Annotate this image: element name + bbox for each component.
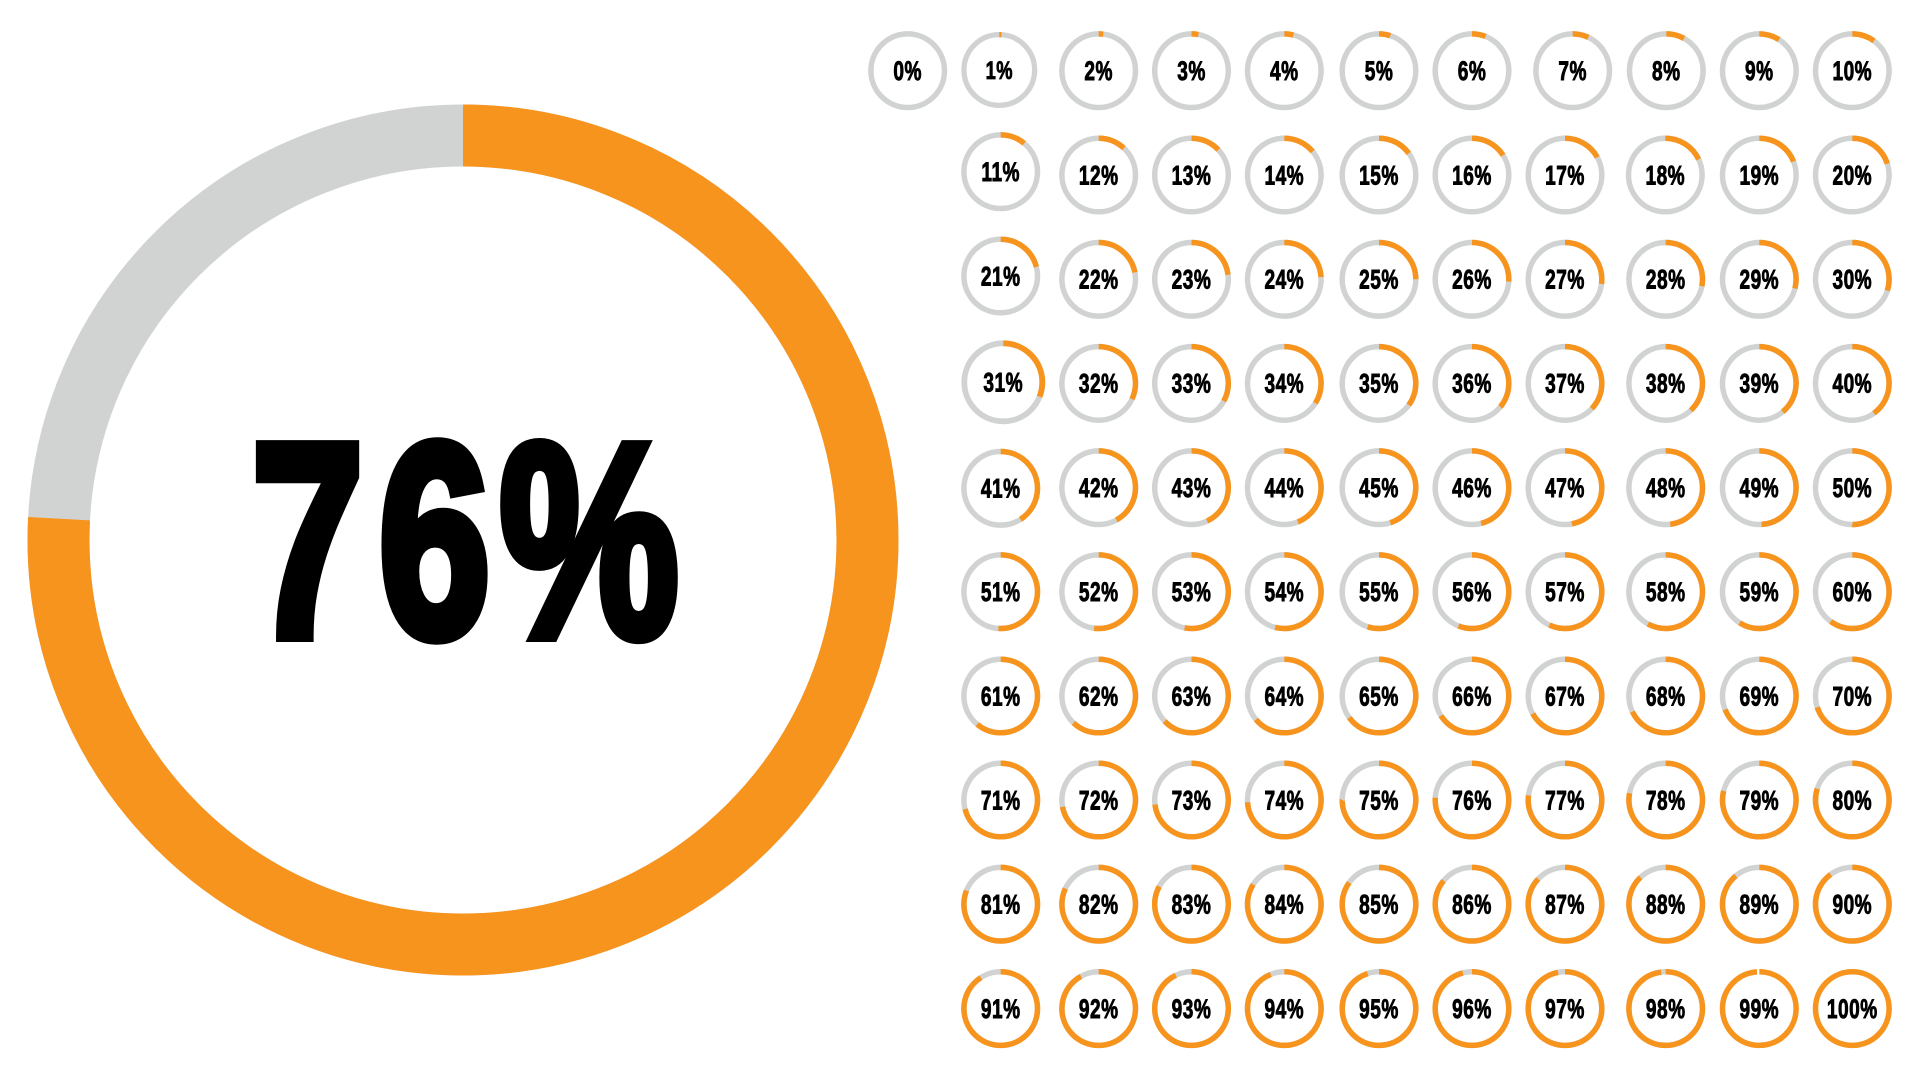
- ring 75%: [1342, 763, 1416, 837]
- ring 18%: 18%: [1645, 160, 1685, 190]
- ring 76%: 76%: [1452, 785, 1492, 815]
- ring 41%: 41%: [981, 473, 1021, 503]
- ring 69%: 69%: [1739, 681, 1779, 711]
- ring 98%: [1629, 972, 1702, 1045]
- ring 17%: [1528, 138, 1602, 212]
- ring 61%: 61%: [981, 681, 1021, 711]
- ring 74%: [1248, 763, 1321, 837]
- ring 84%: 84%: [1264, 889, 1304, 919]
- ring 34%: 34%: [1264, 369, 1304, 398]
- ring 17%: 17%: [1545, 160, 1585, 190]
- ring 53%: [1155, 555, 1228, 628]
- ring 89%: [1722, 867, 1796, 941]
- ring 45%: 45%: [1359, 473, 1399, 503]
- ring 42%: [1062, 451, 1136, 524]
- ring 26%: [1435, 242, 1509, 316]
- ring 2%: 2%: [1084, 56, 1113, 86]
- ring 74%: 74%: [1264, 785, 1304, 815]
- ring 94%: [1248, 972, 1321, 1045]
- ring 94%: 94%: [1264, 994, 1304, 1024]
- ring 22%: [1062, 242, 1136, 316]
- ring 68%: 68%: [1646, 681, 1686, 711]
- large value label: 76%: [252, 387, 679, 695]
- ring 31%: [964, 343, 1042, 421]
- ring 70%: 70%: [1832, 681, 1872, 711]
- ring 10%: [1816, 34, 1889, 108]
- ring 33%: 33%: [1172, 369, 1211, 398]
- ring 42%: 42%: [1079, 473, 1119, 503]
- ring 86%: [1435, 867, 1509, 941]
- ring 57%: [1528, 555, 1602, 628]
- ring 82%: 82%: [1079, 889, 1119, 919]
- ring 32%: [1062, 347, 1136, 420]
- ring 65%: 65%: [1359, 681, 1399, 711]
- ring 66%: [1435, 659, 1509, 733]
- ring 78%: 78%: [1646, 785, 1686, 815]
- ring 100%: 100%: [1827, 994, 1878, 1024]
- ring 59%: [1722, 555, 1796, 628]
- ring 45%: [1342, 451, 1416, 524]
- ring 19%: 19%: [1739, 160, 1779, 190]
- ring 48%: [1629, 451, 1702, 524]
- ring 68%: [1629, 659, 1702, 733]
- ring 87%: [1528, 867, 1602, 941]
- ring 93%: 93%: [1172, 994, 1211, 1024]
- ring 14%: [1248, 138, 1321, 212]
- ring 69%: [1722, 659, 1796, 733]
- ring 5%: 5%: [1365, 56, 1393, 86]
- ring 21%: 21%: [981, 261, 1021, 291]
- ring 80%: 80%: [1832, 785, 1872, 815]
- ring 92%: 92%: [1079, 994, 1119, 1024]
- ring 47%: [1528, 451, 1602, 524]
- ring 26%: 26%: [1452, 264, 1492, 294]
- ring 75%: 75%: [1359, 785, 1399, 815]
- ring 55%: 55%: [1359, 577, 1399, 607]
- ring 36%: [1435, 347, 1509, 420]
- ring 90%: 90%: [1832, 889, 1872, 919]
- ring 63%: 63%: [1172, 681, 1211, 711]
- ring 20%: 20%: [1832, 160, 1872, 190]
- ring 88%: [1629, 867, 1702, 941]
- ring 23%: [1155, 242, 1228, 316]
- ring 24%: 24%: [1264, 264, 1304, 294]
- ring 35%: 35%: [1359, 369, 1399, 398]
- ring 95%: [1342, 972, 1416, 1045]
- ring 67%: [1528, 659, 1602, 733]
- ring 72%: 72%: [1079, 785, 1119, 815]
- ring 79%: [1722, 763, 1796, 837]
- ring 14%: 14%: [1264, 160, 1304, 190]
- ring 73%: 73%: [1172, 785, 1211, 815]
- ring 1%: 1%: [986, 56, 1013, 85]
- ring 49%: [1722, 451, 1796, 524]
- panel: small percentage rings grid: [871, 34, 1889, 1045]
- ring 64%: [1248, 659, 1321, 733]
- ring 82%: [1062, 867, 1136, 941]
- ring 48%: 48%: [1646, 473, 1686, 503]
- ring 30%: [1816, 242, 1889, 316]
- ring 39%: [1722, 347, 1796, 420]
- ring 25%: [1342, 242, 1416, 316]
- ring 60%: 60%: [1832, 577, 1872, 607]
- ring 91%: 91%: [981, 994, 1021, 1024]
- ring 95%: 95%: [1359, 994, 1399, 1024]
- ring 38%: [1629, 347, 1702, 420]
- ring 34%: [1248, 347, 1321, 420]
- ring 99%: [1722, 972, 1796, 1045]
- ring 19%: [1722, 138, 1796, 212]
- ring 79%: 79%: [1739, 785, 1779, 815]
- ring 27%: [1528, 242, 1602, 316]
- ring 0%: [871, 34, 944, 108]
- ring 55%: [1342, 555, 1416, 628]
- ring 2%: [1062, 34, 1136, 108]
- ring 62%: [1062, 659, 1136, 733]
- ring 41%: [964, 452, 1038, 525]
- ring 97%: [1528, 972, 1602, 1045]
- ring 18%: [1628, 138, 1702, 212]
- ring 93%: [1155, 972, 1228, 1045]
- ring 29%: 29%: [1739, 264, 1779, 294]
- ring 44%: 44%: [1264, 473, 1304, 503]
- ring 23%: 23%: [1172, 264, 1211, 294]
- ring 24%: [1248, 242, 1321, 316]
- ring 40%: 40%: [1832, 369, 1872, 398]
- ring 63%: [1155, 659, 1228, 733]
- ring 91%: [964, 972, 1038, 1045]
- ring 28%: 28%: [1646, 264, 1686, 294]
- ring 9%: [1722, 34, 1796, 108]
- ring 9%: 9%: [1745, 56, 1774, 86]
- ring 73%: [1155, 763, 1228, 837]
- ring 33%: [1155, 347, 1228, 420]
- ring 12%: [1062, 138, 1136, 212]
- ring 56%: [1435, 555, 1509, 628]
- ring 8%: 8%: [1652, 56, 1681, 86]
- ring 16%: 16%: [1452, 160, 1492, 190]
- ring 7%: [1536, 34, 1610, 108]
- ring 81%: [964, 867, 1038, 941]
- ring 12%: 12%: [1079, 160, 1119, 190]
- ring 97%: 97%: [1545, 994, 1585, 1024]
- ring 35%: [1342, 347, 1416, 420]
- ring 20%: [1816, 138, 1889, 212]
- ring 56%: 56%: [1452, 577, 1492, 607]
- ring 67%: 67%: [1545, 681, 1585, 711]
- ring 47%: 47%: [1545, 473, 1585, 503]
- ring 22%: 22%: [1079, 264, 1119, 294]
- ring 30%: 30%: [1832, 264, 1872, 294]
- ring 15%: 15%: [1359, 160, 1399, 190]
- ring 32%: 32%: [1079, 369, 1119, 398]
- ring 88%: 88%: [1646, 889, 1686, 919]
- ring 27%: 27%: [1545, 264, 1585, 294]
- ring 58%: 58%: [1646, 577, 1686, 607]
- ring 62%: 62%: [1079, 681, 1119, 711]
- ring 6%: 6%: [1458, 56, 1486, 86]
- ring 87%: 87%: [1545, 889, 1585, 919]
- ring 44%: [1248, 451, 1321, 524]
- ring 65%: [1342, 659, 1416, 733]
- ring 36%: 36%: [1452, 369, 1492, 398]
- ring 13%: [1155, 138, 1228, 212]
- ring 66%: 66%: [1452, 681, 1492, 711]
- ring 50%: 50%: [1832, 473, 1872, 503]
- ring 86%: 86%: [1452, 889, 1492, 919]
- ring 4%: 4%: [1270, 56, 1299, 86]
- ring 13%: 13%: [1172, 160, 1211, 190]
- ring 92%: [1062, 972, 1136, 1045]
- ring 16%: [1435, 138, 1509, 212]
- ring 77%: [1528, 763, 1602, 837]
- ring 76%: [1435, 763, 1509, 837]
- ring 10%: 10%: [1832, 56, 1872, 86]
- ring 81%: 81%: [981, 889, 1021, 919]
- ring 83%: 83%: [1172, 889, 1211, 919]
- ring 38%: 38%: [1646, 369, 1686, 398]
- ring 78%: [1629, 763, 1702, 837]
- ring 51%: [964, 555, 1038, 628]
- ring 46%: [1435, 451, 1509, 524]
- ring 84%: [1248, 867, 1321, 941]
- ring 83%: [1155, 867, 1228, 941]
- ring 70%: [1816, 659, 1889, 733]
- ring 98%: 98%: [1646, 994, 1686, 1024]
- ring 85%: 85%: [1359, 889, 1399, 919]
- ring 21%: [964, 239, 1038, 313]
- ring 52%: [1062, 555, 1136, 628]
- ring 50%: [1816, 451, 1889, 524]
- ring 99%: 99%: [1739, 994, 1779, 1024]
- ring 4%: [1248, 34, 1321, 108]
- ring 71%: [964, 763, 1038, 837]
- ring 39%: 39%: [1739, 369, 1779, 398]
- ring 49%: 49%: [1739, 473, 1779, 503]
- ring 60%: [1816, 555, 1889, 628]
- ring 7%: 7%: [1558, 56, 1587, 86]
- ring 71%: 71%: [981, 785, 1021, 815]
- ring 59%: 59%: [1739, 577, 1779, 607]
- ring 89%: 89%: [1739, 889, 1779, 919]
- ring 53%: 53%: [1172, 577, 1211, 607]
- ring 58%: [1629, 555, 1702, 628]
- ring 37%: 37%: [1545, 369, 1585, 398]
- ring 29%: [1722, 242, 1796, 316]
- ring 37%: [1528, 347, 1602, 420]
- ring 5%: [1342, 34, 1416, 108]
- ring 46%: 46%: [1452, 473, 1492, 503]
- ring 3%: [1155, 34, 1228, 108]
- ring 61%: [964, 659, 1038, 733]
- ring 72%: [1062, 763, 1136, 837]
- ring 80%: [1816, 763, 1889, 837]
- ring 100%: [1816, 972, 1889, 1045]
- ring 1%: [964, 35, 1035, 105]
- ring 43%: 43%: [1172, 473, 1211, 503]
- ring 40%: [1816, 347, 1889, 420]
- ring 96%: [1435, 972, 1509, 1045]
- ring 54%: 54%: [1264, 577, 1304, 607]
- ring 51%: 51%: [981, 577, 1021, 607]
- ring 15%: [1342, 138, 1416, 212]
- ring 8%: [1630, 34, 1703, 108]
- ring 6%: [1435, 34, 1509, 108]
- ring 11%: 11%: [981, 157, 1020, 187]
- ring 52%: 52%: [1079, 577, 1119, 607]
- ring 3%: 3%: [1177, 56, 1206, 86]
- ring 77%: 77%: [1545, 785, 1585, 815]
- ring 11%: [964, 135, 1038, 208]
- ring 28%: [1629, 242, 1702, 316]
- ring 54%: [1248, 555, 1321, 628]
- ring 25%: 25%: [1359, 264, 1399, 294]
- ring 0%: 0%: [893, 56, 922, 86]
- ring 96%: 96%: [1452, 994, 1492, 1024]
- ring 85%: [1342, 867, 1416, 941]
- ring 31%: 31%: [983, 368, 1023, 397]
- ring 90%: [1816, 867, 1889, 941]
- ring 43%: [1155, 451, 1228, 524]
- ring 57%: 57%: [1545, 577, 1585, 607]
- ring 64%: 64%: [1264, 681, 1304, 711]
